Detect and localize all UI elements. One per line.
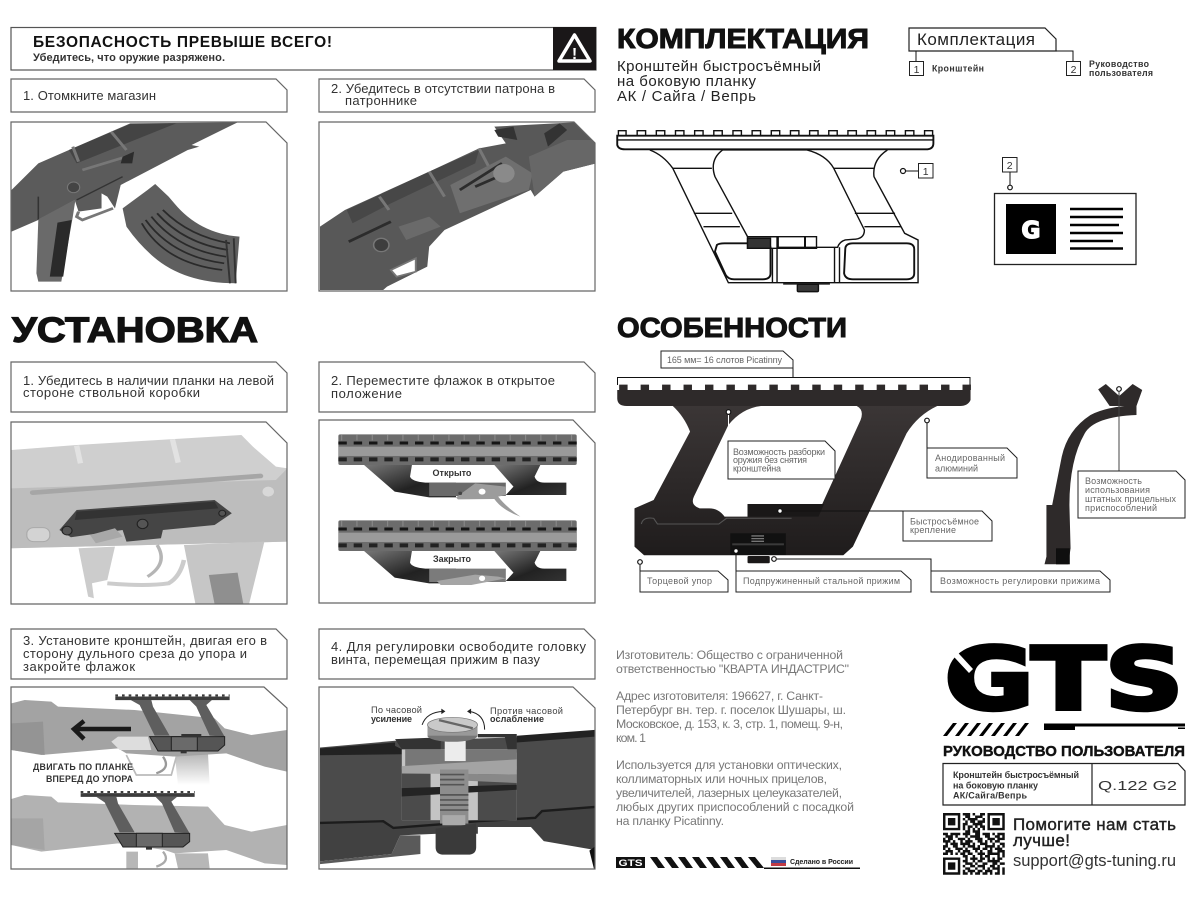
clockwise caption (371, 705, 422, 724)
callout: spring clamp (734, 549, 911, 592)
lever open caption: Открыто (433, 468, 472, 478)
step label: check chamber (319, 79, 595, 112)
step label: unlatch magazine: 1. Отомкните магазин (23, 88, 156, 103)
callout: disassembly (726, 410, 835, 479)
item 1 (910, 62, 984, 76)
arrow: slide direction (74, 721, 131, 739)
step label: check rail: стороне ствольной коробки (23, 385, 200, 400)
logo accent stripes (943, 723, 1185, 736)
callout: iron sights: Возможность (1085, 476, 1142, 486)
manufacturer text: ответственностью "КВАРТА ИНДАСТРИС" (616, 662, 849, 676)
callout: item 2: 2 (1007, 160, 1013, 172)
callout: spring clamp: Подпружиненный стальной прижим (743, 576, 900, 586)
callout: item 1 (900, 164, 933, 178)
panel: rifle with open receiver (319, 122, 596, 291)
manufacturer text: коллиматорных или ночных прицелов, (616, 772, 827, 786)
illustration: user manual: G (1022, 218, 1040, 244)
support email: support@gts-tuning.ru (1013, 852, 1176, 870)
callout: quick release (778, 509, 992, 541)
callout: anodized aluminium: Анодированный (935, 453, 1005, 463)
manufacturer text (616, 648, 854, 828)
step label: slide bracket forward: 3. Установите кронштейн, двигая его в (23, 633, 267, 648)
callout: iron sights: использования (1085, 485, 1150, 495)
callout: end stop (638, 560, 728, 592)
bracket: lever closed (338, 520, 577, 585)
bracket: lever open (338, 434, 577, 517)
panel: lever open and closed positions (319, 420, 595, 603)
step label: unlatch magazine (11, 79, 287, 112)
step label: adjust screw: винта, перемещая прижим в пазу (331, 652, 540, 667)
manufacturer text: Используется для установки оптических, (616, 758, 842, 772)
photo: bracket front view (617, 387, 972, 563)
callout: clamp adjustment (772, 557, 1110, 592)
model info box: на боковую планку (953, 780, 1038, 790)
heading: installation: УСТАНОВКА (12, 310, 258, 350)
step label: slide bracket forward: закройте флажок (23, 659, 135, 674)
manufacturer text: Московское, д. 153, к. 3, стр. 1, помещ. 9-н, (616, 717, 843, 731)
callout: quick release: Быстросъёмное (910, 516, 979, 526)
icon: Russian flag (771, 857, 786, 866)
panel: adjustment screw close-up (319, 687, 599, 871)
manufacturer text: увеличителей, лазерных целеуказателей, (616, 786, 842, 800)
step label: slide bracket forward (11, 629, 287, 679)
counterclockwise caption (490, 706, 563, 724)
GTS logo: GTS (945, 630, 1183, 730)
counterclockwise caption: Против часовой (490, 706, 563, 716)
callout: item 2 (1002, 158, 1017, 190)
line drawing: bracket (617, 131, 933, 292)
manufacturer text: любых других приспособлений с посадкой (616, 800, 854, 814)
product description: на боковую планку (617, 73, 756, 90)
footer strip: made in Russia: GTS (618, 858, 642, 868)
model number: Q.122 G2 (1098, 778, 1177, 793)
heading: user manual: РУКОВОДСТВО ПОЛЬЗОВАТЕЛЯ (943, 743, 1185, 760)
callout: disassembly: оружия без снятия (733, 455, 807, 465)
panel: rifle with magazine removed (11, 122, 287, 291)
callout: clamp adjustment: Возможность регулировки прижима (940, 576, 1100, 586)
clockwise caption: усиление (371, 714, 412, 724)
callout: quick release: крепление (910, 525, 956, 535)
item 2: Руководство (1089, 59, 1150, 69)
model info box: Кронштейн быстросъёмный (953, 770, 1079, 780)
feedback prompt: Помогите нам стать (1013, 815, 1176, 834)
footer strip: made in Russia (616, 857, 860, 869)
item 2: пользователя (1089, 68, 1153, 78)
counterclockwise caption: ослабление (490, 714, 544, 724)
icon: warning triangle (553, 27, 596, 70)
panel: receiver side rail highlighted (11, 422, 287, 604)
step label: open the lever (319, 362, 595, 412)
step label: slide bracket forward: сторону дульного среза до упора и (23, 646, 247, 661)
step label: check chamber: патроннике (345, 93, 417, 108)
step label: open the lever: положение (331, 386, 402, 401)
callout: rail length (618, 351, 970, 385)
feedback prompt: лучше! (1013, 831, 1070, 850)
panel: sliding bracket along rifle (11, 687, 287, 869)
item 2: 2 (1071, 64, 1077, 76)
item 1: Кронштейн (932, 64, 984, 74)
callout: iron sights (1078, 387, 1185, 518)
icon: warning triangle: ! (572, 46, 577, 63)
callout: iron sights: штатных прицельных (1085, 494, 1176, 504)
callout: disassembly: Возможность разборки (733, 447, 825, 457)
step label: check chamber: 2. Убедитесь в отсутствии патрона в (331, 81, 555, 96)
product description: АК / Сайга / Вепрь (617, 88, 756, 105)
heading: features: ОСОБЕННОСТИ (617, 312, 847, 343)
product description (617, 58, 821, 105)
sliding instruction text: ДВИГАТЬ ПО ПЛАНКЕ (33, 762, 133, 772)
step label: adjust screw (319, 629, 595, 679)
callout: disassembly: кронштейна (733, 464, 781, 474)
feedback prompt (1013, 815, 1176, 850)
manufacturer text: Изготовитель: Общество с ограниченной (616, 648, 843, 662)
product description: Кронштейн быстросъёмный (617, 58, 821, 75)
lever closed caption: Закрыто (433, 554, 472, 564)
callout: anodized aluminium (925, 418, 1017, 478)
contents tree: Комплектация (917, 30, 1035, 49)
illustration: user manual (994, 194, 1136, 264)
callout: anodized aluminium: алюминий (935, 464, 978, 474)
photo: bracket side view (1045, 384, 1142, 564)
footer strip: made in Russia: Сделано в России (790, 859, 853, 866)
callout: iron sights: приспособлений (1085, 503, 1157, 513)
step label: adjust screw: 4. Для регулировки освободите головку (331, 639, 586, 654)
manufacturer text: Петербург вн. тер. г. поселок Шушары, ш. (616, 703, 846, 717)
item 2 (1066, 59, 1153, 78)
step label: check rail: 1. Убедитесь в наличии планки на левой (23, 373, 274, 388)
clockwise caption: По часовой (371, 705, 422, 715)
QR code (943, 814, 1005, 874)
manufacturer text: на планку Picatinny. (616, 814, 724, 828)
heading: contents: КОМПЛЕКТАЦИЯ (617, 23, 869, 54)
manufacturer text: ком. 1 (616, 731, 646, 745)
model info box (943, 764, 1185, 805)
panel: sliding bracket along rifle: ВПЕРЕД ДО УПОРА (46, 774, 134, 784)
model info box: АК/Сайга/Вепрь (953, 790, 1027, 800)
step label: open the lever: 2. Переместите флажок в открытое (331, 373, 555, 388)
item 1: 1 (914, 64, 920, 76)
callout: rail length: 165 мм= 16 слотов Picatinny (667, 355, 782, 365)
safety subheading: Убедитесь, что оружие разряжено. (33, 52, 225, 64)
step label: check rail (11, 362, 287, 412)
callout: end stop: Торцевой упор (647, 576, 712, 586)
safety banner (11, 27, 596, 70)
callout: item 1: 1 (923, 166, 929, 178)
safety heading: БЕЗОПАСНОСТЬ ПРЕВЫШЕ ВСЕГО! (33, 34, 332, 51)
contents tree (909, 28, 1153, 78)
manufacturer text: Адрес изготовителя: 196627, г. Санкт- (616, 689, 823, 703)
